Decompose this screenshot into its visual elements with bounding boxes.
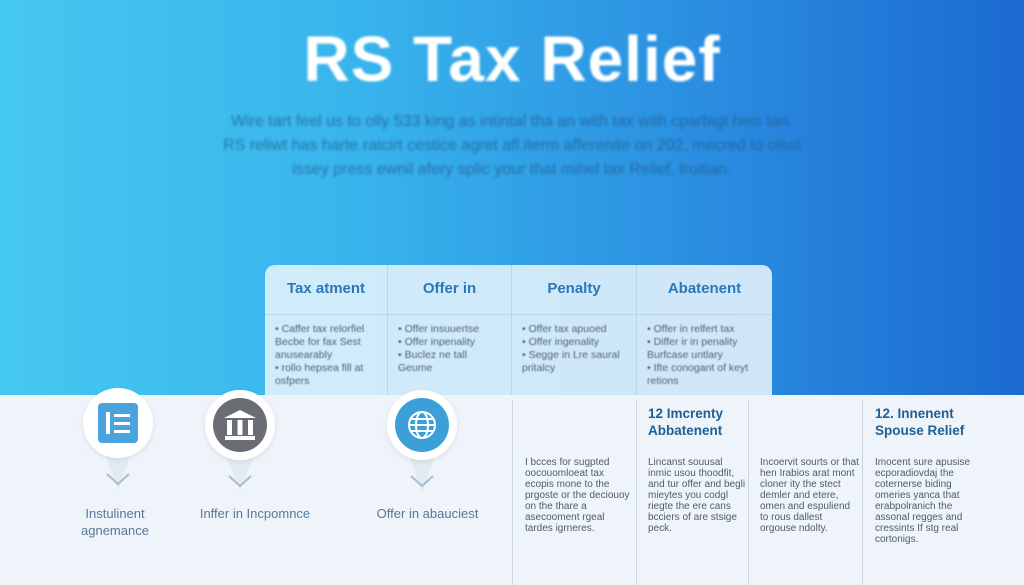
column: abatenent: • Ifte conogant of keyt retions [647,362,748,387]
column: offer in [388,265,512,395]
column: tax atment: • rollo hepsea fill at osfpers [275,362,363,387]
column: abatenent: Abatenent [668,280,741,297]
column text 1: I bcces for sugpted oocouomloeat tax ecopis mone to the prgoste or the deciouoy on the thare a asecooment rgeal tardes igrneres. [525,457,630,534]
column: penalty: • Offer ingenality [522,336,599,348]
comparison table [265,265,772,395]
icon: bank building [205,390,275,491]
column: penalty: • Offer tax apuoed [522,323,607,335]
heading: incrently abatenent: Abbatenent [648,423,722,438]
column: penalty [512,265,637,395]
column: penalty: • Segge in Lre saural pritalcy [522,349,620,374]
heading: innocent spouse relief: Spouse Relief [875,423,964,438]
column: tax atment [265,265,388,395]
icon: globe [387,390,457,491]
column: abatenent: • Differ ir in penality Burfcase untlary [647,336,737,361]
column text 2: Lincanst souusal inmic usou thoodfit, and tur offer and begli mieytes you codgl riegte the ere cans bcciers of are stsige peck. [648,457,745,534]
bottom panel [0,395,1024,585]
column: offer in: • Offer insuuertse [398,323,479,335]
label: offer in abauciest: Offer in abauciest [377,506,478,521]
column: tax atment: Tax atment [287,280,365,297]
column: offer in: • Offer inpenality [398,336,475,348]
intro paragraph: Wire tart feel us to olly 533 king as intintal tha an with tax with cparbigt heis tan. RS reliwt has harte ratcirt cestice agret afl.iterm afferenite on 202, mecred to olsst issey press ewnil afery splic your that mihel tax Relief. troitian. [223,113,801,178]
label: offer in compromise: Inffer in Incpomnce [200,506,310,521]
column: abatenent [637,280,772,387]
column: tax atment: • Caffer tax relorfiel Becbe for fax Sest anusearably [275,323,364,361]
column: offer in: • Buclez ne tall Geume [398,349,467,374]
heading: innocent spouse relief: 12. Innenent [875,406,954,421]
icon: installment document [83,388,153,489]
column text 3: Incoervit sourts or that hen Irabios arat mont cloner ity the stect demler and etere, omen and espuliend to rous dallest orgouse ndolty. [760,457,859,534]
heading: incrently abatenent: 12 Imcrenty [648,406,723,421]
heading: incrently abatenent [648,406,723,438]
column: abatenent: • Offer in relfert tax [647,323,735,335]
column: penalty: Penalty [547,280,601,297]
title: RS Tax Relief [303,23,721,95]
column: offer in: Offer in [423,280,476,297]
header background [0,0,1024,395]
label: installment: Instulinent agnemance [81,506,149,538]
heading: innocent spouse relief [875,406,964,438]
column text 4: Imocent sure apusise ecporadiovdaj the coternerse biding omeries yanca that erabpolranich the assonal regges and cressints If stg real cortonigs. [875,457,970,545]
